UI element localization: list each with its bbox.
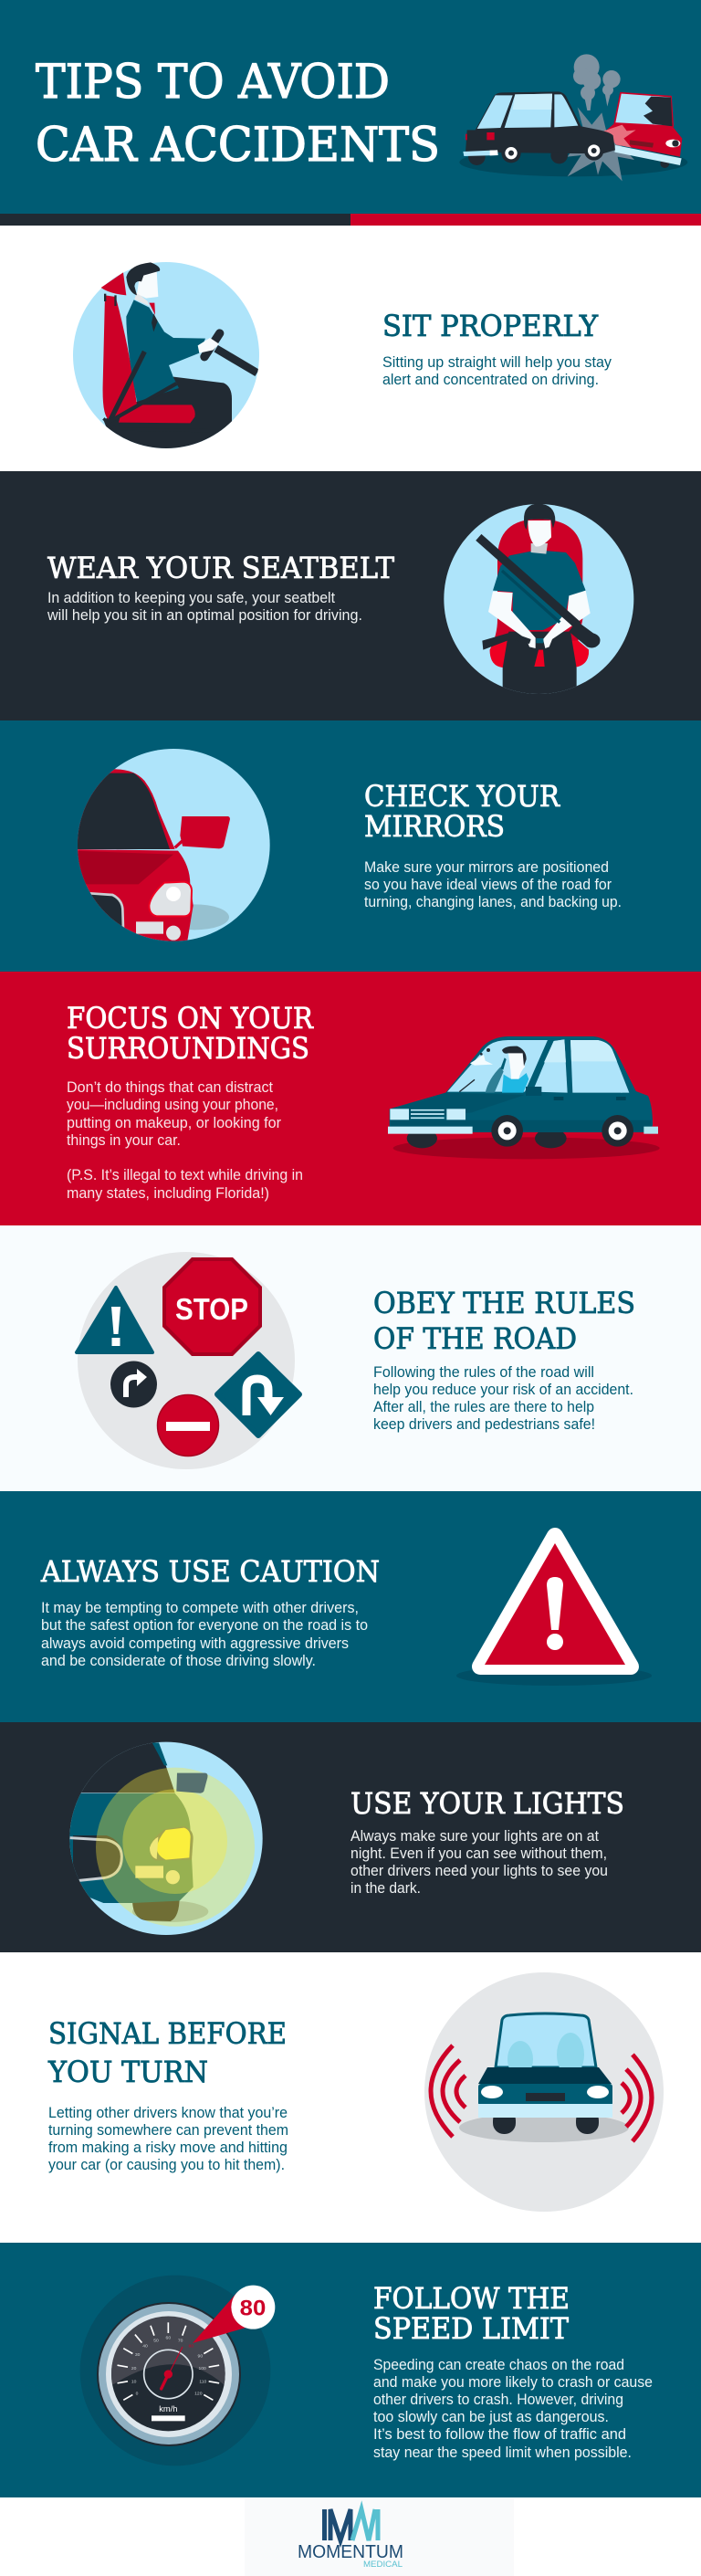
illustration: speedometer: 100 — [199, 2366, 206, 2371]
illustration: road signs — [77, 1252, 299, 1469]
body text: too slowly can be just as dangerous. — [373, 2408, 609, 2425]
body text: Make sure your mirrors are positioned — [364, 858, 609, 876]
section background — [0, 1722, 701, 1952]
heading: YOU TURN — [47, 2056, 208, 2089]
heading: SPEED LIMIT — [373, 2313, 569, 2346]
header stripe dark — [0, 214, 350, 226]
illustration: speedometer: km/h — [159, 2404, 177, 2413]
body text: and be considerate of those driving slowly. — [41, 1652, 316, 1669]
icon: no entry sign — [157, 1395, 219, 1456]
body text: stay near the speed limit when possible. — [373, 2444, 632, 2461]
heading: OBEY THE RULES — [373, 1288, 635, 1320]
illustration: speedometer: 80 — [189, 2344, 194, 2350]
body text: Letting other drivers know that you’re — [48, 2104, 288, 2121]
body text — [373, 1363, 633, 1433]
heading: SIT PROPERLY — [382, 310, 599, 343]
heading: CHECK YOUR — [364, 781, 560, 814]
heading: SIGNAL BEFORE — [48, 2018, 287, 2051]
heading: FOLLOW THE — [373, 2283, 570, 2316]
section background — [0, 226, 701, 471]
icon: stop sign: STOP — [175, 1292, 248, 1326]
icon: warning triangle sign — [77, 1288, 152, 1352]
body text — [41, 1599, 368, 1669]
body text — [48, 2104, 288, 2173]
section background — [0, 720, 701, 972]
body text: but the safest option for everyone on the road is to — [41, 1616, 368, 1634]
section background — [0, 2243, 701, 2497]
body text: turning, changing lanes, and backing up. — [364, 893, 622, 910]
heading: OF THE ROAD — [373, 1323, 577, 1356]
panel: sit properly — [73, 262, 612, 448]
body text: In addition to keeping you safe, your seatbelt — [47, 589, 335, 606]
body text: putting on makeup, or looking for — [67, 1114, 281, 1131]
illustration: speedometer: 40 — [142, 2344, 148, 2350]
body text: will help you sit in an optimal position for driving. — [47, 606, 362, 624]
heading — [47, 2018, 287, 2089]
body text: It may be tempting to compete with other drivers, — [41, 1599, 359, 1616]
panel: obey the rules of the road — [0, 1225, 701, 1491]
heading: ALWAYS USE CAUTION — [40, 1556, 380, 1589]
panel: always use caution — [0, 1491, 701, 1722]
body text: It’s best to follow the flow of traffic and — [373, 2425, 626, 2443]
illustration: speedometer: 20 — [131, 2366, 137, 2371]
body text: and make you more likely to crash or cause — [373, 2373, 653, 2391]
illustration: car with turn signals — [424, 1972, 664, 2212]
logo: Momentum Medical: MOMENTUM — [298, 2542, 403, 2562]
panel: wear your seatbelt — [0, 471, 701, 720]
body text: Speeding can create chaos on the road — [373, 2356, 624, 2373]
body text: your car (or causing you to hit them). — [48, 2156, 285, 2173]
heading — [364, 781, 560, 844]
heading: USE YOUR LIGHTS — [350, 1788, 624, 1821]
heading: SURROUNDINGS — [67, 1033, 309, 1066]
panel: footer — [0, 2497, 701, 2576]
body text: Following the rules of the road will — [373, 1363, 594, 1381]
icon: caution triangle — [456, 1536, 652, 1686]
logo: Momentum Medical: MEDICAL — [363, 2560, 403, 2570]
body text: night. Even if you can see without them, — [350, 1845, 607, 1862]
heading — [67, 1003, 314, 1066]
icon: car crash — [459, 54, 687, 181]
illustration: seated driver — [73, 262, 259, 450]
body text: Sitting up straight will help you stay — [382, 353, 612, 371]
illustration: speedometer: 70 — [178, 2338, 183, 2343]
body text: always avoid competing with aggressive drivers — [41, 1635, 349, 1652]
body text — [350, 1827, 608, 1897]
icon: turn right sign — [110, 1361, 157, 1408]
heading — [373, 2283, 570, 2346]
logo plate — [245, 2498, 514, 2576]
body text: alert and concentrated on driving. — [382, 371, 599, 388]
illustration: speedometer: 0 — [136, 2391, 139, 2396]
title: CAR ACCIDENTS — [36, 119, 440, 173]
section background — [0, 1952, 701, 2243]
illustration: red car mirror — [73, 749, 270, 948]
illustration: speedometer — [80, 2276, 275, 2466]
body text: from making a risky move and hitting — [48, 2139, 288, 2156]
body text: in the dark. — [350, 1879, 421, 1897]
body text — [373, 2356, 653, 2461]
icon: u-turn sign — [217, 1354, 299, 1435]
body text: (P.S. It’s illegal to text while driving in — [67, 1166, 303, 1183]
illustration: speedometer: 120 — [194, 2391, 203, 2396]
panel: use your lights — [0, 1722, 701, 1952]
header background — [0, 0, 701, 214]
icon: stop sign — [162, 1257, 262, 1356]
body text: keep drivers and pedestrians safe! — [373, 1415, 595, 1433]
body text: you—including using your phone, — [67, 1096, 278, 1113]
body text: other drivers to crash. However, driving — [373, 2391, 623, 2408]
body text: other drivers need your lights to see you — [350, 1862, 608, 1879]
logo: Momentum Medical — [298, 2509, 403, 2570]
illustration: distracted driver in car — [388, 1036, 660, 1159]
body text — [364, 858, 622, 910]
illustration: speedometer: 60 — [166, 2336, 171, 2341]
illustration: driver with seatbelt — [444, 504, 633, 705]
title: TIPS TO AVOID — [36, 56, 390, 110]
header stripe red — [350, 214, 701, 226]
panel: focus on your surroundings — [0, 972, 701, 1225]
heading: WEAR YOUR SEATBELT — [47, 552, 394, 585]
title — [36, 56, 440, 173]
section background — [0, 972, 701, 1225]
heading: FOCUS ON YOUR — [67, 1003, 314, 1036]
body text — [382, 353, 612, 388]
illustration: speedometer: 90 — [198, 2354, 203, 2360]
section background — [0, 1491, 701, 1722]
body text: Don’t do things that can distract — [67, 1078, 273, 1096]
body text — [47, 589, 362, 624]
panel: signal before you turn — [0, 1952, 701, 2243]
heading — [373, 1288, 635, 1356]
illustration: speedometer: 10 — [131, 2379, 137, 2384]
illustration: speedometer: 30 — [135, 2352, 141, 2358]
body text — [67, 1078, 303, 1202]
body text: things in your car. — [67, 1131, 181, 1149]
illustration: speedometer: 80 — [240, 2297, 266, 2321]
body text: Always make sure your lights are on at — [350, 1827, 599, 1845]
illustration: speedometer: 110 — [199, 2379, 207, 2384]
body text: so you have ideal views of the road for — [364, 876, 612, 893]
illustration: headlights at night — [64, 1735, 263, 1935]
body text: After all, the rules are there to help — [373, 1398, 594, 1415]
body text: help you reduce your risk of an accident. — [373, 1381, 633, 1398]
section background — [0, 471, 701, 720]
body text: many states, including Florida!) — [67, 1184, 269, 1202]
illustration: speedometer: 50 — [153, 2338, 159, 2343]
heading: MIRRORS — [364, 811, 505, 844]
panel: check your mirrors — [0, 720, 701, 972]
section background — [0, 1225, 701, 1491]
footer background — [0, 2497, 701, 2576]
panel: header — [0, 0, 701, 226]
body text: turning somewhere can prevent them — [48, 2121, 288, 2139]
panel: follow the speed limit — [0, 2243, 701, 2497]
